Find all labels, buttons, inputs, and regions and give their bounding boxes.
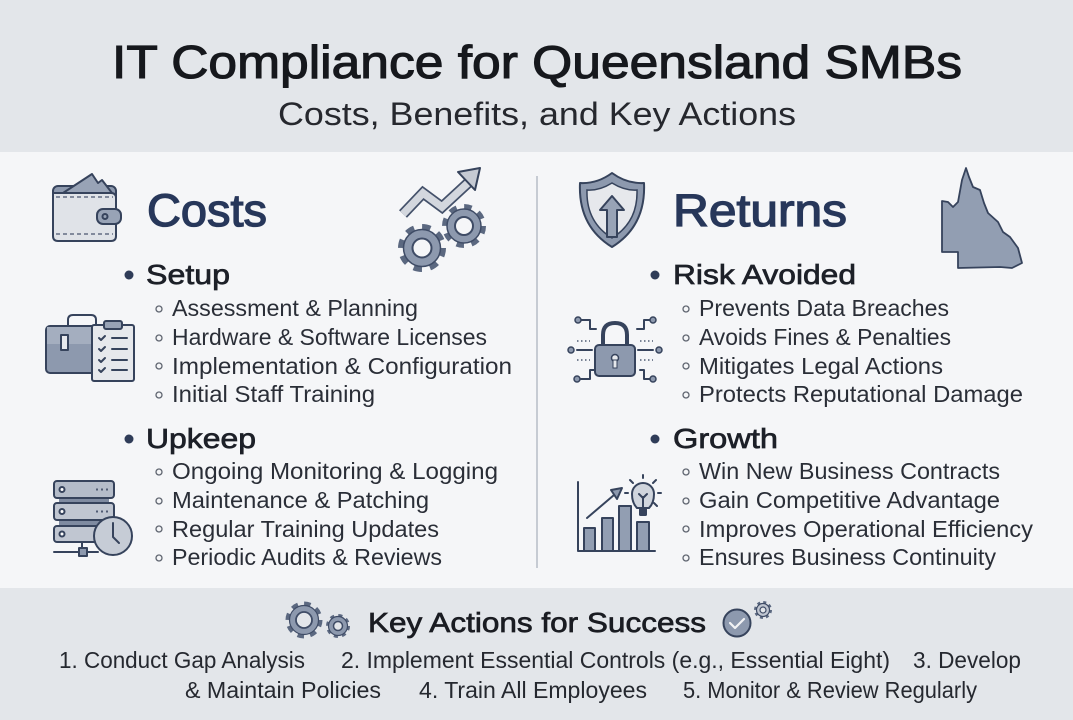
icon: circuit padlock (568, 317, 662, 382)
subsection: risk avoided: Risk Avoided (673, 259, 856, 290)
heading: returns: Returns (673, 185, 847, 236)
subsection: upkeep (124, 423, 498, 570)
text: action list: & Maintain Policies (185, 677, 381, 703)
subsection: setup: Setup (146, 259, 230, 290)
footer band (0, 588, 1073, 720)
subsection: setup (124, 259, 512, 407)
text: action list: 4. Train All Employees (419, 677, 647, 703)
panel: returns (568, 168, 1034, 570)
icon: queensland map (942, 168, 1022, 268)
text: action list: 2. Implement Essential Controls (e.g., Essential Eight) (341, 647, 890, 673)
subsection: growth (650, 423, 1034, 570)
subsection: upkeep: Maintenance & Patching (172, 487, 429, 513)
subsection: risk avoided: Prevents Data Breaches (699, 295, 949, 321)
heading: key actions: Key Actions for Success (368, 607, 706, 638)
icon: toolbox and checklist (46, 315, 134, 381)
icon: servers and clock (54, 481, 132, 556)
subsection: upkeep: Upkeep (146, 423, 256, 454)
icon: gears (289, 605, 348, 636)
heading: costs: Costs (147, 185, 267, 236)
subsection: setup: Assessment & Planning (172, 295, 418, 321)
subsection: upkeep: Ongoing Monitoring & Logging (172, 458, 498, 484)
subsection: setup: Initial Staff Training (172, 381, 375, 407)
icon: wallet (53, 174, 121, 241)
text: action list: 5. Monitor & Review Regularly (683, 677, 977, 703)
subsection: growth: Win New Business Contracts (699, 458, 1000, 484)
text: action list: 1. Conduct Gap Analysis (59, 647, 305, 673)
subsection: growth: Ensures Business Continuity (699, 544, 996, 570)
subsection: risk avoided: Mitigates Legal Actions (699, 353, 943, 379)
header band (0, 0, 1073, 152)
subsection: risk avoided: Avoids Fines & Penalties (699, 324, 951, 350)
title: IT Compliance for Queensland SMBs (112, 36, 962, 88)
subtitle: Costs, Benefits, and Key Actions (278, 96, 796, 132)
subsection: upkeep: Periodic Audits & Reviews (172, 544, 442, 570)
subsection: growth: Improves Operational Efficiency (699, 516, 1034, 542)
subsection: setup: Hardware & Software Licenses (172, 324, 487, 350)
icon: shield with arrow (580, 173, 644, 247)
subsection: risk avoided: Protects Reputational Damage (699, 381, 1023, 407)
subsection: growth: Growth (673, 423, 778, 454)
panel: costs (46, 168, 512, 570)
subsection: setup: Implementation & Configuration (172, 353, 512, 379)
text: action list (59, 647, 1021, 703)
icon: trend arrow and gears (402, 168, 482, 268)
subsection: risk avoided (650, 259, 1023, 407)
subsection: upkeep: Regular Training Updates (172, 516, 439, 542)
subsection: growth: Gain Competitive Advantage (699, 487, 1000, 513)
icon: growth chart with light bulb (578, 475, 661, 551)
text: action list: 3. Develop (913, 647, 1021, 673)
icon: check badge with gear (724, 603, 770, 636)
